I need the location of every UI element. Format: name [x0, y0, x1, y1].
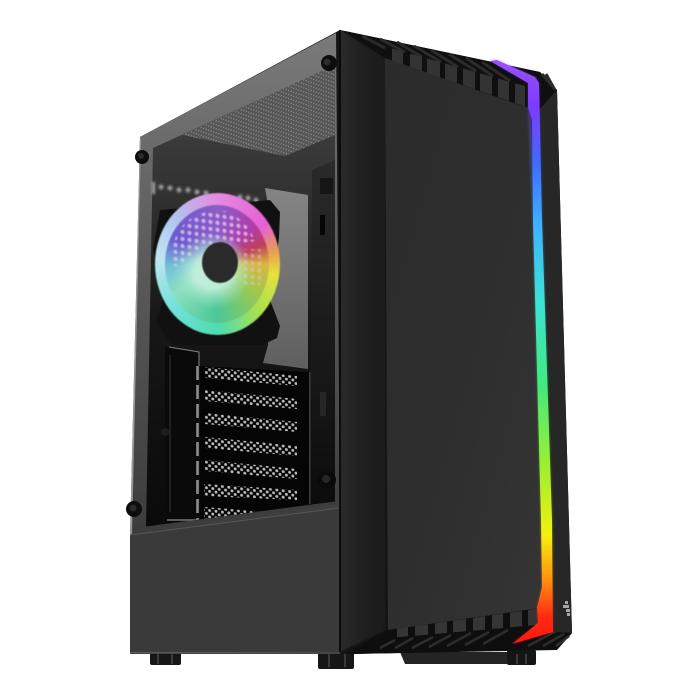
- expansion slot panel: [200, 366, 309, 520]
- ventilated ceiling mesh: [182, 65, 335, 156]
- screw: top left: [135, 150, 149, 164]
- right side trim: [539, 90, 572, 633]
- screw: bottom right: [318, 471, 336, 489]
- screw: bottom left: [126, 501, 142, 517]
- fan hub: [202, 242, 238, 283]
- rgb light strip: [490, 60, 553, 644]
- top vent blocks: [392, 48, 525, 107]
- bottom vent recess: [345, 608, 572, 654]
- top vent ribs: [362, 36, 555, 90]
- rgb fan: [155, 193, 280, 335]
- rear fan mount holes: [152, 182, 258, 206]
- fan frame: [153, 200, 280, 345]
- rgb light strip glow: [490, 60, 553, 644]
- case interior: [146, 65, 335, 528]
- feet and stand: [150, 650, 536, 669]
- fan blade disc: [165, 205, 269, 323]
- bottom vent blocks: [397, 608, 538, 637]
- grey cable shroud bar: [263, 188, 308, 369]
- corner spine: [340, 30, 385, 652]
- inner rear column: [310, 160, 335, 506]
- drive cage: [161, 347, 199, 522]
- lower front panel: [130, 508, 340, 653]
- glass window frame: [130, 33, 340, 535]
- side silhouette: [130, 30, 572, 654]
- logo mark: [563, 601, 570, 616]
- fan grille dots: [172, 210, 262, 307]
- front face panel: [385, 58, 544, 630]
- bottom vent ribs: [380, 630, 569, 648]
- top vent recess: [345, 31, 557, 110]
- screw: top right: [321, 55, 337, 71]
